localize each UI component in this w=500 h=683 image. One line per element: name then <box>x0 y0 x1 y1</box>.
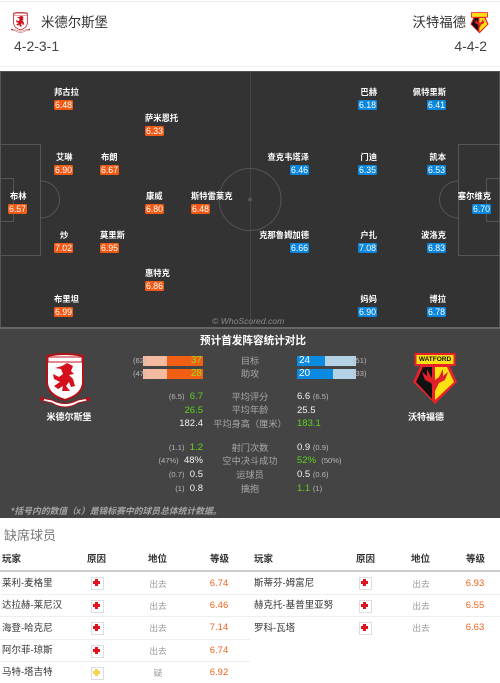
away value: tackles: 1.1 (1) <box>297 483 322 494</box>
row: 斯蒂芬-姆富尼 <box>250 576 500 594</box>
away value: age: 25.5 <box>297 405 316 416</box>
player: 萨米恩托 <box>145 113 178 136</box>
left table column headers <box>0 553 250 567</box>
player: 布里坦: 布里坦 <box>54 294 79 304</box>
bar track <box>297 369 356 379</box>
row: 莱利-麦格里: 6.74 <box>210 578 228 589</box>
panel: lineup statistics comparison <box>0 329 500 518</box>
stat label: 运球员: 运球员 <box>236 470 264 480</box>
player: 康威 <box>145 191 164 214</box>
row: 罗科-瓦塔: 罗科-瓦塔 <box>254 623 295 634</box>
player: 塞尔维克: 塞尔维克 <box>458 191 491 201</box>
player: 艾琳: 艾琳 <box>56 152 73 162</box>
bar track <box>297 356 356 366</box>
player: 佩特里斯 <box>412 87 446 110</box>
tournament total: (47) <box>133 369 147 378</box>
column: player: 玩家 <box>2 554 21 565</box>
home value: tackles: (1) 0.8 <box>175 483 203 494</box>
row: 斯蒂芬-姆富尼: 出去 <box>412 579 430 589</box>
player: 查克韦塔泽 <box>268 152 309 175</box>
row: 斯蒂芬-姆富尼: 斯蒂芬-姆富尼 <box>254 578 314 589</box>
bar value: 24 <box>299 355 310 366</box>
icon: Watford crest small <box>470 12 489 34</box>
player: 邦古拉: 6.48 <box>55 100 72 110</box>
player: 凯本: 凯本 <box>429 152 446 162</box>
player: 布林: 6.57 <box>9 204 26 214</box>
row: 赫克托-基普里亚努: 出去 <box>412 601 430 611</box>
player: 莫里斯 <box>100 230 125 253</box>
bar track <box>143 369 203 379</box>
row: 赫克托-基普里亚努: 6.55 <box>466 600 484 611</box>
away value: height: 183.1 <box>297 418 321 429</box>
home goals bar <box>133 355 203 366</box>
player: 惠特克: 6.86 <box>146 281 163 291</box>
player: 斯特雷莱克: 斯特雷莱克 <box>191 191 232 201</box>
player: 惠特克: 惠特克 <box>145 268 170 278</box>
tournament total: (33) <box>353 369 367 378</box>
row: 达拉赫-莱尼汉: 6.46 <box>210 600 228 611</box>
player: 塞尔维克 <box>458 191 491 214</box>
player: 妈妈 <box>358 294 377 317</box>
home formation: 4-2-3-1 <box>14 38 59 54</box>
home assists bar <box>133 368 203 379</box>
row: 莱利-麦格里 <box>0 576 250 594</box>
bar value fill <box>167 356 203 366</box>
column: rating: 等级 <box>466 554 485 565</box>
player: 巴赫: 6.18 <box>359 100 376 110</box>
row: 莱利-麦格里: 莱利-麦格里 <box>2 578 53 589</box>
watermark: © WhoScored.com <box>212 316 284 326</box>
home value: height: 182.4 <box>179 418 203 429</box>
home value: rating: (6.5) 6.7 <box>169 391 203 402</box>
section heading: 缺席球员 <box>4 528 56 543</box>
column: status: 地位 <box>411 554 430 565</box>
away crest name: 沃特福德 <box>408 412 444 422</box>
player: 萨米恩托: 萨米恩托 <box>145 113 178 123</box>
row: 赫克托-基普里亚努: 赫克托-基普里亚努 <box>254 600 333 611</box>
panel: match header <box>0 0 500 71</box>
player: 查克韦塔泽: 6.46 <box>291 165 308 175</box>
header top rule <box>0 1 500 2</box>
row: 海登-哈克尼: 出去 <box>149 623 167 633</box>
home team name: 米德尔斯堡 <box>41 15 108 30</box>
player: 布朗: 布朗 <box>101 152 118 162</box>
bar track <box>143 356 203 366</box>
player: 凯本: 6.53 <box>428 165 445 175</box>
player: 户扎: 户扎 <box>360 230 377 240</box>
player: 炒 <box>54 230 73 253</box>
column: player: 玩家 <box>254 554 273 565</box>
player: 斯特雷莱克: 6.48 <box>192 204 209 214</box>
player: 康威: 6.80 <box>146 204 163 214</box>
bar value: 28 <box>191 368 202 379</box>
player: 佩特里斯: 佩特里斯 <box>413 87 446 97</box>
tournament total: (62) <box>133 356 147 365</box>
column: status: 地位 <box>148 554 167 565</box>
player: 妈妈: 6.90 <box>359 307 376 317</box>
stat label: 平均身高: 平均身高（厘米） <box>213 419 287 429</box>
row: 海登-哈克尼: 海登-哈克尼 <box>2 623 53 634</box>
player: 邦古拉 <box>54 87 79 110</box>
row: 阿尔菲-琼斯 <box>0 643 250 661</box>
tournament total: (51) <box>353 356 367 365</box>
row: 阿尔菲-琼斯: 6.74 <box>210 645 228 656</box>
header bottom rule <box>0 66 500 67</box>
player: 户扎: 7.08 <box>359 243 376 253</box>
row: 莱利-麦格里: 出去 <box>149 579 167 589</box>
player: 波洛克: 6.83 <box>428 243 445 253</box>
away value: shots: 0.9 (0.9) <box>297 442 328 453</box>
column: rating: 等级 <box>210 554 229 565</box>
stat label: 空中决斗成功: 空中决斗成功 <box>222 456 278 466</box>
player: 门迪 <box>358 152 377 175</box>
row: 达拉赫-莱尼汉: 出去 <box>149 601 167 611</box>
player: 博拉: 博拉 <box>429 294 446 304</box>
panel: missing players <box>0 518 500 681</box>
player: 布林: 布林 <box>10 191 27 201</box>
player: 波洛克 <box>421 230 446 253</box>
icon: Watford crest <box>413 353 457 404</box>
player: 巴赫: 巴赫 <box>360 87 377 97</box>
row: 罗科-瓦塔: 出去 <box>412 623 430 633</box>
player: 康威: 康威 <box>146 191 163 201</box>
pitch markings <box>0 71 500 329</box>
player: 惠特克 <box>145 268 170 291</box>
row: 罗科-瓦塔: 6.63 <box>466 622 484 633</box>
player: 莫里斯: 6.95 <box>101 243 118 253</box>
player: 凯本 <box>427 152 446 175</box>
row: 海登-哈克尼 <box>0 620 250 638</box>
player: 布里坦: 6.99 <box>55 307 72 317</box>
row: 赫克托-基普里亚努 <box>250 598 500 616</box>
icon: Middlesbrough crest <box>40 353 90 408</box>
stats heading: 预计首发阵容统计对比 <box>200 335 306 347</box>
player: 门迪: 6.35 <box>359 165 376 175</box>
column: reason: 原因 <box>87 554 106 565</box>
away value: aerial: 52% (50%) <box>297 455 342 466</box>
player: 斯特雷莱克 <box>191 191 232 214</box>
icon: Middlesbrough crest small <box>11 12 30 33</box>
home value: aerial: (47%) 48% <box>158 455 203 466</box>
away team name: 沃特福德 <box>412 15 466 30</box>
player: 炒: 炒 <box>60 230 68 240</box>
away goals bar <box>297 355 367 366</box>
column: reason: 原因 <box>356 554 375 565</box>
player: 艾琳: 6.90 <box>55 165 72 175</box>
row: 阿尔菲-琼斯: 出去 <box>149 646 167 656</box>
player: 莫里斯: 莫里斯 <box>100 230 125 240</box>
player: 博拉: 6.78 <box>428 307 445 317</box>
player: 查克韦塔泽: 查克韦塔泽 <box>268 152 309 162</box>
player: 佩特里斯: 6.41 <box>428 100 445 110</box>
row: 达拉赫-莱尼汉 <box>0 598 250 616</box>
player: 布朗 <box>100 152 119 175</box>
player: 克那鲁姆加德 <box>259 230 309 253</box>
player: 门迪: 门迪 <box>360 152 377 162</box>
stat label: 助攻: 助攻 <box>241 369 259 379</box>
row: 达拉赫-莱尼汉: 达拉赫-莱尼汉 <box>2 600 62 611</box>
stat label: 射门次数: 射门次数 <box>232 443 268 453</box>
stat label: 平均年龄: 平均年龄 <box>232 405 268 415</box>
row: 马特-塔吉特: 疑 <box>154 668 162 678</box>
bar value fill <box>297 369 333 379</box>
row: 马特-塔吉特: 6.92 <box>210 667 228 678</box>
player: 炒: 7.02 <box>55 243 72 253</box>
home value: dribbles: (0.7) 0.5 <box>169 469 203 480</box>
player: 布林 <box>8 191 27 214</box>
player: 巴赫 <box>358 87 377 110</box>
right table column headers <box>250 553 500 567</box>
away value: rating: 6.6 (6.5) <box>297 391 328 402</box>
away assists bar <box>297 368 367 379</box>
player: 克那鲁姆加德: 克那鲁姆加德 <box>259 230 309 240</box>
away formation: 4-4-2 <box>454 38 487 54</box>
table header rule <box>0 570 500 572</box>
home value: shots: (1.1) 1.2 <box>169 442 203 453</box>
row: 马特-塔吉特 <box>0 665 250 683</box>
row: 斯蒂芬-姆富尼: 6.93 <box>466 578 484 589</box>
bar value: 37 <box>191 355 202 366</box>
bar value fill <box>297 356 325 366</box>
row: 阿尔菲-琼斯: 阿尔菲-琼斯 <box>2 645 53 656</box>
home value: age: 26.5 <box>184 405 203 416</box>
player: 克那鲁姆加德: 6.66 <box>291 243 308 253</box>
player: 户扎 <box>358 230 377 253</box>
player: 萨米恩托: 6.33 <box>146 126 163 136</box>
player: 邦古拉: 邦古拉 <box>54 87 79 97</box>
away value: dribbles: 0.5 (0.6) <box>297 469 328 480</box>
player: 波洛克: 波洛克 <box>421 230 446 240</box>
bar value fill <box>167 369 203 379</box>
home crest name: 米德尔斯堡 <box>46 412 92 422</box>
panel: pitch <box>0 71 500 329</box>
row: 罗科-瓦塔 <box>250 620 500 638</box>
row: 海登-哈克尼: 7.14 <box>210 622 228 633</box>
stat label: 擒抱: 擒抱 <box>241 484 259 494</box>
player: 塞尔维克: 6.70 <box>473 204 490 214</box>
row: 马特-塔吉特: 马特-塔吉特 <box>2 667 53 678</box>
Watford crest wordmark: WATFORD <box>419 356 451 363</box>
player: 博拉 <box>427 294 446 317</box>
footnote: *括号内的数值（x）是锦标赛中的球员总体统计数据。 <box>11 506 222 516</box>
stat label: 平均评分: 平均评分 <box>232 392 268 402</box>
bar value: 20 <box>299 368 310 379</box>
stat label: 目标: 目标 <box>241 356 259 366</box>
player: 妈妈: 妈妈 <box>360 294 377 304</box>
player: 布朗: 6.67 <box>101 165 118 175</box>
player: 布里坦 <box>54 294 79 317</box>
player: 艾琳 <box>54 152 73 175</box>
